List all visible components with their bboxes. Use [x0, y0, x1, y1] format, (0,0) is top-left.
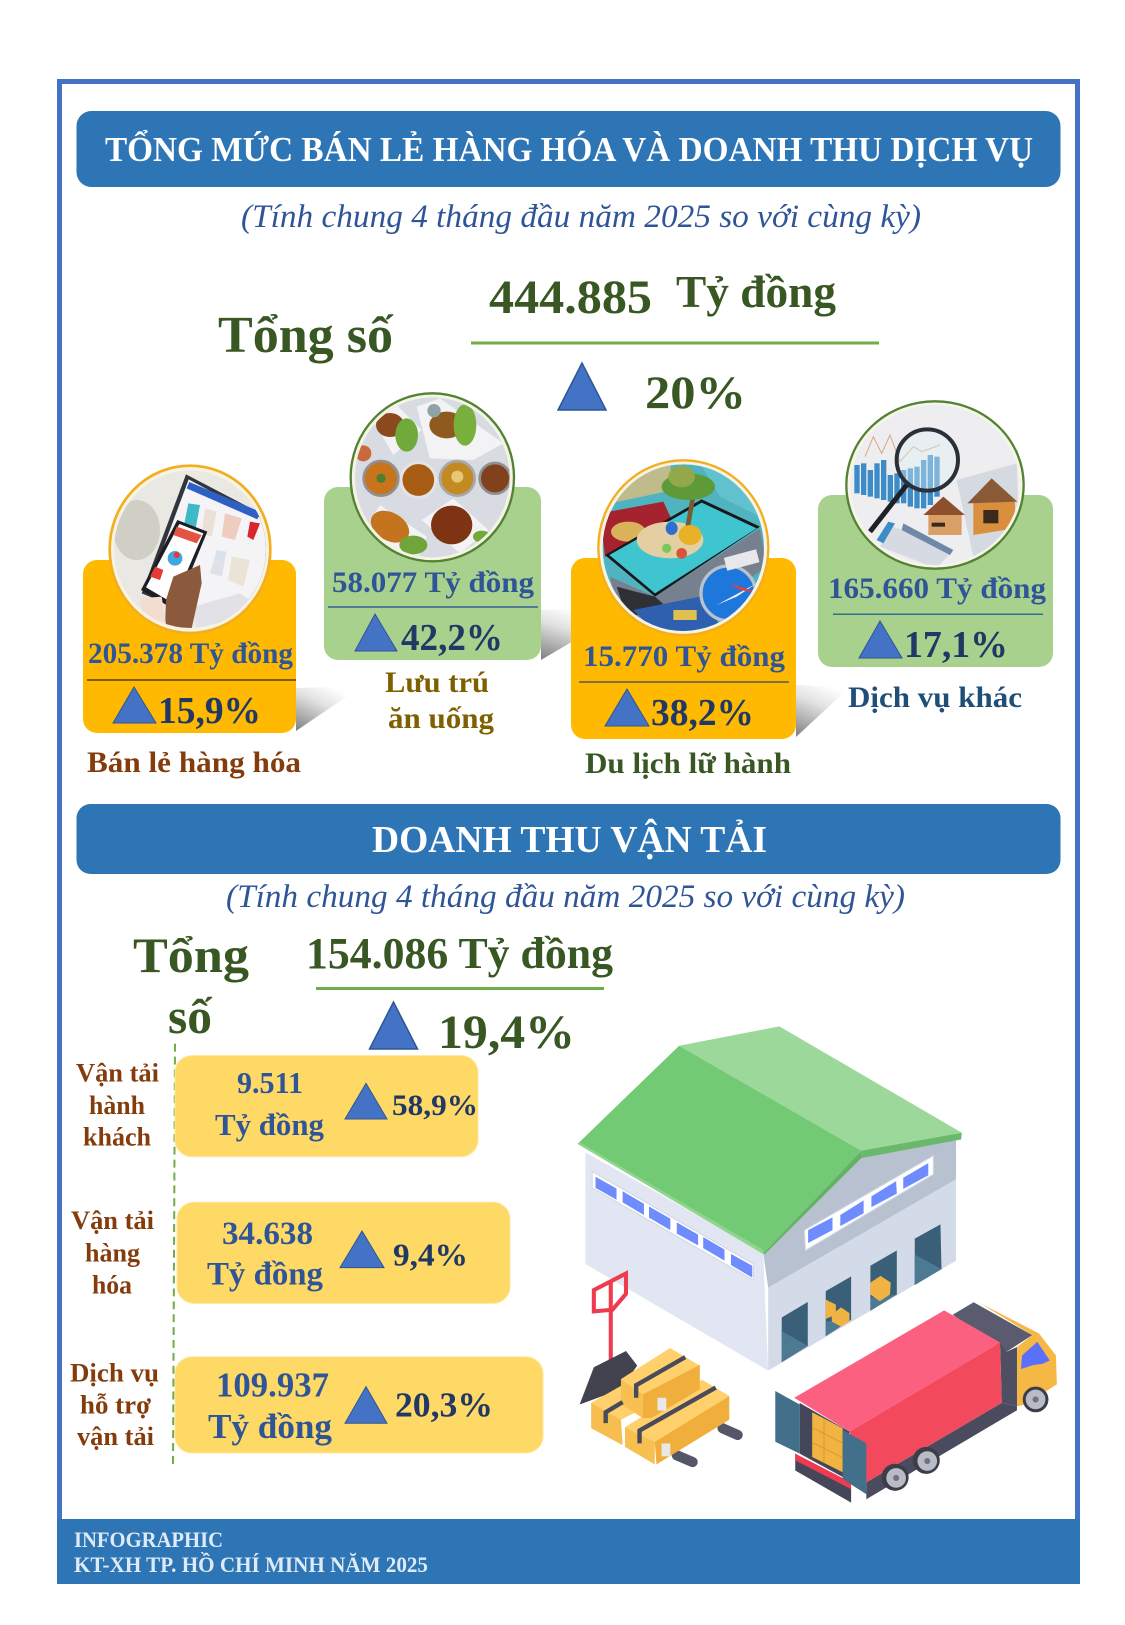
row: support services: Dịch vụ	[70, 1358, 159, 1388]
illustration: warehouse, pallet and truck	[578, 1026, 1057, 1503]
subtitle: transport period: (Tính chung 4 tháng đầu năm 2025 so với cùng kỳ)	[226, 879, 905, 915]
label: lodging and food: Lưu trú	[385, 666, 489, 699]
total retail summary: Tỷ đồng	[676, 267, 836, 317]
total transport summary: 19,4%	[438, 1006, 575, 1059]
row: freight transport: 34.638	[222, 1216, 313, 1252]
row: support services: 20,3%	[395, 1385, 493, 1424]
row: freight transport: Vận tải	[71, 1205, 155, 1235]
row: freight transport: 9,4%	[393, 1238, 468, 1273]
label: travel: Du lịch lữ hành	[585, 747, 791, 780]
row: support services: vận tải	[77, 1421, 155, 1451]
header banner: transport: DOANH THU VẬN TẢI	[372, 819, 767, 861]
row: passenger transport: 9.511	[237, 1066, 303, 1100]
total transport summary	[133, 927, 613, 1059]
label: lodging and food: ăn uống	[388, 702, 494, 735]
label: lodging and food	[385, 666, 494, 735]
card: other services: 165.660 Tỷ đồng	[828, 572, 1046, 605]
photo: food dishes	[350, 393, 517, 563]
label: other services: Dịch vụ khác	[848, 681, 1022, 714]
delivery truck	[775, 1302, 1057, 1503]
label: retail goods: Bán lẻ hàng hóa	[87, 746, 301, 779]
total retail summary: Tổng số	[218, 307, 394, 364]
card: retail goods	[83, 466, 296, 733]
card: retail goods: 205.378 Tỷ đồng	[88, 637, 293, 670]
card: travel	[571, 460, 796, 739]
header banner: transport	[76, 804, 1060, 874]
card: travel: 38,2%	[651, 692, 754, 734]
photo: online shopping on phone	[107, 466, 273, 633]
pallet truck with boxes	[580, 1274, 738, 1464]
card: retail goods: 15,9%	[158, 690, 261, 732]
card: lodging and food: 42,2%	[401, 617, 503, 659]
row: support services	[70, 1357, 543, 1453]
photo: travel tablet and island	[598, 460, 768, 637]
photo: magnifier, chart and houses	[846, 400, 1024, 570]
row: support services: 109.937	[216, 1366, 329, 1404]
card: other services: 17,1%	[904, 624, 1008, 666]
card: other services	[818, 400, 1053, 667]
row: freight transport: hàng	[85, 1238, 141, 1268]
card: lodging and food: 58.077 Tỷ đồng	[332, 566, 534, 599]
footer band: KT-XH TP. HỒ CHÍ MINH NĂM 2025	[74, 1552, 428, 1577]
card: travel: 15.770 Tỷ đồng	[583, 640, 785, 673]
row: freight transport: Tỷ đồng	[207, 1257, 324, 1292]
row: passenger transport: 58,9%	[392, 1089, 478, 1122]
row: passenger transport: Vận tải	[76, 1057, 160, 1087]
row: freight transport: hóa	[92, 1270, 133, 1299]
footer band: INFOGRAPHIC	[74, 1527, 223, 1552]
total retail summary: 20%	[645, 367, 746, 419]
card: lodging and food	[324, 393, 541, 660]
dashed divider	[173, 1044, 175, 1465]
row: passenger transport: hành	[89, 1090, 145, 1120]
row: freight transport	[71, 1202, 510, 1303]
total transport summary: Tổng	[133, 927, 249, 983]
header banner: retail	[76, 111, 1060, 187]
row: support services: hỗ trợ	[80, 1389, 151, 1419]
subtitle: retail period: (Tính chung 4 tháng đầu năm 2025 so với cùng kỳ)	[241, 199, 921, 235]
total retail summary: 444.885	[489, 271, 652, 324]
row: passenger transport: khách	[83, 1122, 151, 1152]
row: passenger transport: Tỷ đồng	[215, 1108, 325, 1142]
shadow: retail cards	[296, 608, 850, 737]
total transport summary: 154.086 Tỷ đồng	[306, 929, 613, 978]
row: passenger transport	[76, 1056, 478, 1157]
total transport summary: số	[168, 988, 213, 1044]
total retail summary	[218, 267, 879, 419]
row: support services: Tỷ đồng	[208, 1407, 333, 1446]
footer band	[57, 1519, 1080, 1584]
header banner: retail: TỔNG MỨC BÁN LẺ HÀNG HÓA VÀ DOANH THU DỊCH VỤ	[105, 128, 1033, 169]
warehouse	[578, 1026, 962, 1371]
transport rows	[70, 1044, 543, 1465]
